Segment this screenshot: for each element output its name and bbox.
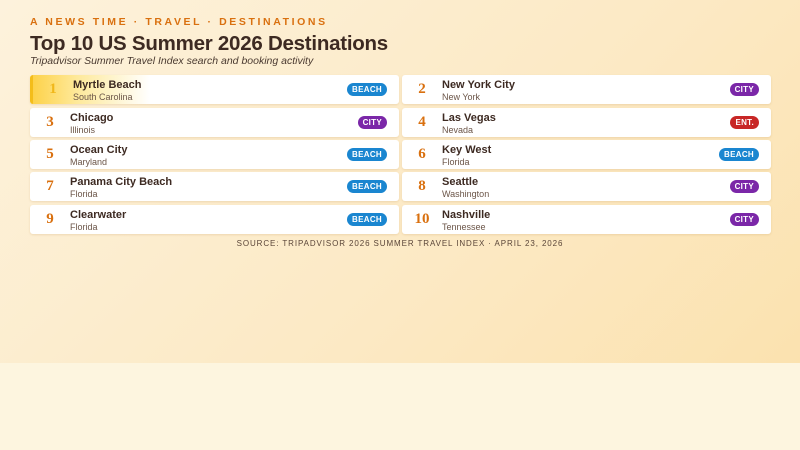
row 9: 9 — [46, 211, 54, 227]
row 3: 3 — [46, 114, 54, 130]
row 9: Florida — [70, 222, 98, 232]
row 10: Nashville — [442, 209, 490, 221]
row 5: BEACH — [352, 150, 382, 159]
row 3: CITY — [363, 118, 382, 127]
row 2: 2 — [418, 81, 426, 97]
row 4: ENT. — [735, 118, 754, 127]
kicker: A NEWS TIME · TRAVEL · DESTINATIONS — [30, 16, 328, 28]
row 5 — [30, 140, 399, 169]
row 8: 8 — [418, 178, 426, 194]
row 6: BEACH — [724, 150, 754, 159]
row 3 — [30, 108, 399, 137]
row 6: Key West — [442, 144, 491, 156]
row 5: Ocean City — [70, 144, 127, 156]
row 9: Clearwater — [70, 209, 126, 221]
row 6: 6 — [418, 146, 426, 162]
source: SOURCE: TRIPADVISOR 2026 SUMMER TRAVEL INDEX · APRIL 23, 2026 — [237, 239, 563, 248]
row 5: 5 — [46, 146, 54, 162]
row 4: Las Vegas — [442, 112, 496, 124]
row 1: BEACH — [352, 85, 382, 94]
subtitle: Tripadvisor Summer Travel Index search and booking activity — [30, 55, 313, 67]
row 10: 10 — [414, 211, 430, 227]
row 7: Panama City Beach — [70, 176, 172, 188]
row 2: New York City — [442, 79, 515, 91]
row 10: Tennessee — [442, 222, 486, 232]
row 8: Seattle — [442, 176, 478, 188]
row 3: Illinois — [70, 125, 95, 135]
row 5: Maryland — [70, 157, 107, 167]
row 10 — [402, 205, 771, 234]
row 4: Nevada — [442, 125, 473, 135]
row 8 — [402, 172, 771, 201]
row 9 — [30, 205, 399, 234]
row 7: BEACH — [352, 182, 382, 191]
row 1 — [30, 75, 399, 104]
row 1: South Carolina — [73, 92, 133, 102]
row 8: CITY — [735, 182, 754, 191]
row 8: Washington — [442, 189, 489, 199]
row 2 — [402, 75, 771, 104]
row 10: CITY — [735, 215, 754, 224]
row 4: 4 — [418, 114, 426, 130]
row 1: 1 — [49, 81, 57, 97]
row 6: Florida — [442, 157, 470, 167]
row 7: 7 — [46, 178, 54, 194]
row 3: Chicago — [70, 112, 113, 124]
row 4 — [402, 108, 771, 137]
row 1: Myrtle Beach — [73, 79, 141, 91]
row 9: BEACH — [352, 215, 382, 224]
title: Top 10 US Summer 2026 Destinations — [30, 32, 388, 55]
row 7: Florida — [70, 189, 98, 199]
row 7 — [30, 172, 399, 201]
row 2: CITY — [735, 85, 754, 94]
row 6 — [402, 140, 771, 169]
row 2: New York — [442, 92, 480, 102]
